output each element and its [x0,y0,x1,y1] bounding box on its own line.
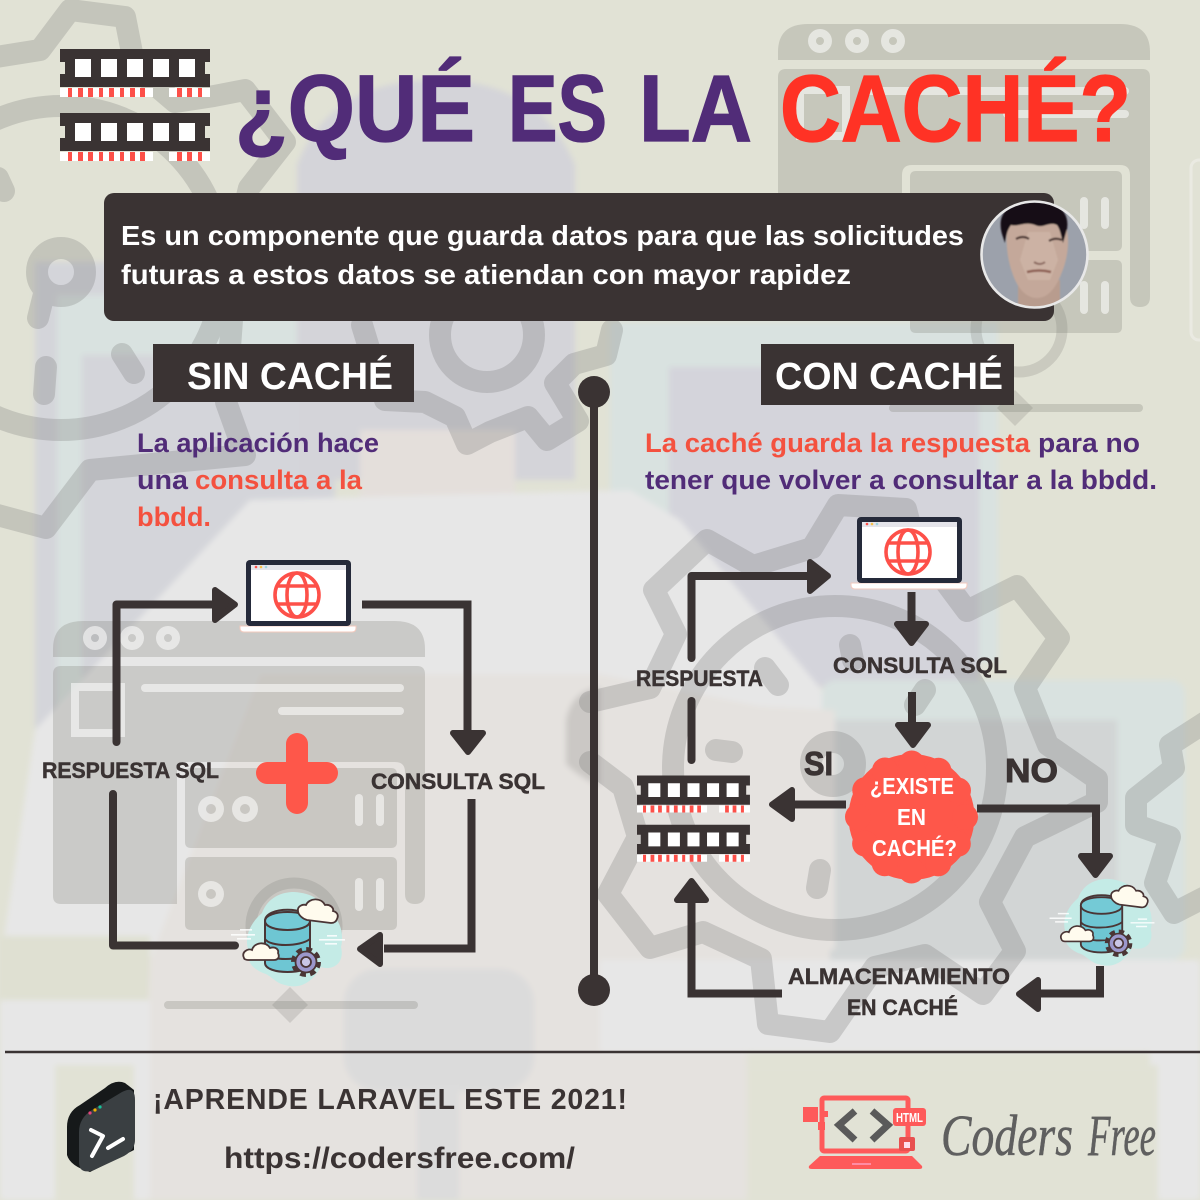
background window icons [53,24,1200,1023]
decision badge: ¿EXISTE [870,773,954,799]
icon: RAM cache [637,776,750,862]
arrow: response to laptop [116,590,235,742]
definition panel: futuras a estos datos se atiendan con mayor rapidez [121,259,851,290]
text: con cache description: La caché guarda la respuesta [645,428,1030,458]
footer text: aprende laravel: ¡APRENDE LARAVEL ESTE 2021! [153,1084,627,1116]
text: sin cache description [137,428,379,532]
label: si: SI [804,745,833,782]
logo: coders free [803,1098,1156,1169]
icon: laptop [240,560,356,632]
arrow: si to cache [772,790,846,819]
icon: database [1050,879,1154,966]
text: sin cache description: una [137,465,188,495]
text: sin cache description: consulta a la [195,465,362,495]
decision badge [848,754,974,880]
label: consulta sql: CONSULTA SQL [371,769,545,794]
label: respuesta: RESPUESTA [636,666,763,691]
title: CACHÉ? [780,56,1131,162]
icon: terminal app [67,1082,135,1172]
arrow: no to database [977,808,1110,875]
title: ¿QUÉ [235,56,475,162]
label: no: NO [1005,752,1058,789]
arrow: laptop to consulta [897,592,926,643]
arrow: database to storage [1019,966,1100,1009]
heading: con cache: CON CACHÉ [775,354,1003,398]
label: almacenamiento en cache: ALMACENAMIENTO [788,964,1010,989]
title: LA [639,56,752,162]
arrow: storage to cache [677,881,782,994]
definition panel: Es un componente que guarda datos para que las solicitudes [121,220,964,251]
text: sin cache description: bbdd. [137,502,211,532]
icon: laptop with code: HTML [896,1110,923,1125]
text: sin cache description: La aplicación hace [137,428,379,458]
label: almacenamiento en cache [788,964,1010,1020]
text: con cache description: para no [1038,428,1140,458]
definition panel [104,193,1054,321]
decision badge: EN [897,804,926,830]
text: con cache description: tener que volver a consultar a la bbdd. [645,465,1157,495]
heading: sin cache [153,344,414,402]
central divider [578,376,610,1006]
icon: laptop with code [803,1098,926,1169]
decision badge: CACHÉ? [872,834,957,861]
diagram: sin cache flow [42,560,545,986]
label: consulta sql: CONSULTA SQL [833,653,1007,678]
heading: con cache [761,344,1014,405]
text: con cache description [645,428,1157,495]
heading: sin cache: SIN CACHÉ [187,354,393,398]
footer text: url: https://codersfree.com/ [224,1142,576,1175]
icon: red plus [256,733,338,814]
title: ES [508,56,607,162]
arrow: consulta to decision [898,692,928,745]
wordmark: Coders [941,1103,1073,1168]
icon: stacked RAM modules [60,49,210,161]
avatar photo [982,202,1088,312]
label: respuesta sql: RESPUESTA SQL [42,758,219,783]
wordmark: Free [1087,1103,1156,1168]
connector: database response [113,794,235,946]
diagram: con cache flow [636,517,1154,1020]
icon: laptop [851,517,967,589]
arrow: query from laptop [362,604,483,752]
label: almacenamiento en cache: EN CACHÉ [847,995,958,1020]
arrow: response to laptop [692,562,828,760]
arrow: query to database [360,799,472,964]
icon: database [231,892,345,986]
title [235,56,1131,162]
